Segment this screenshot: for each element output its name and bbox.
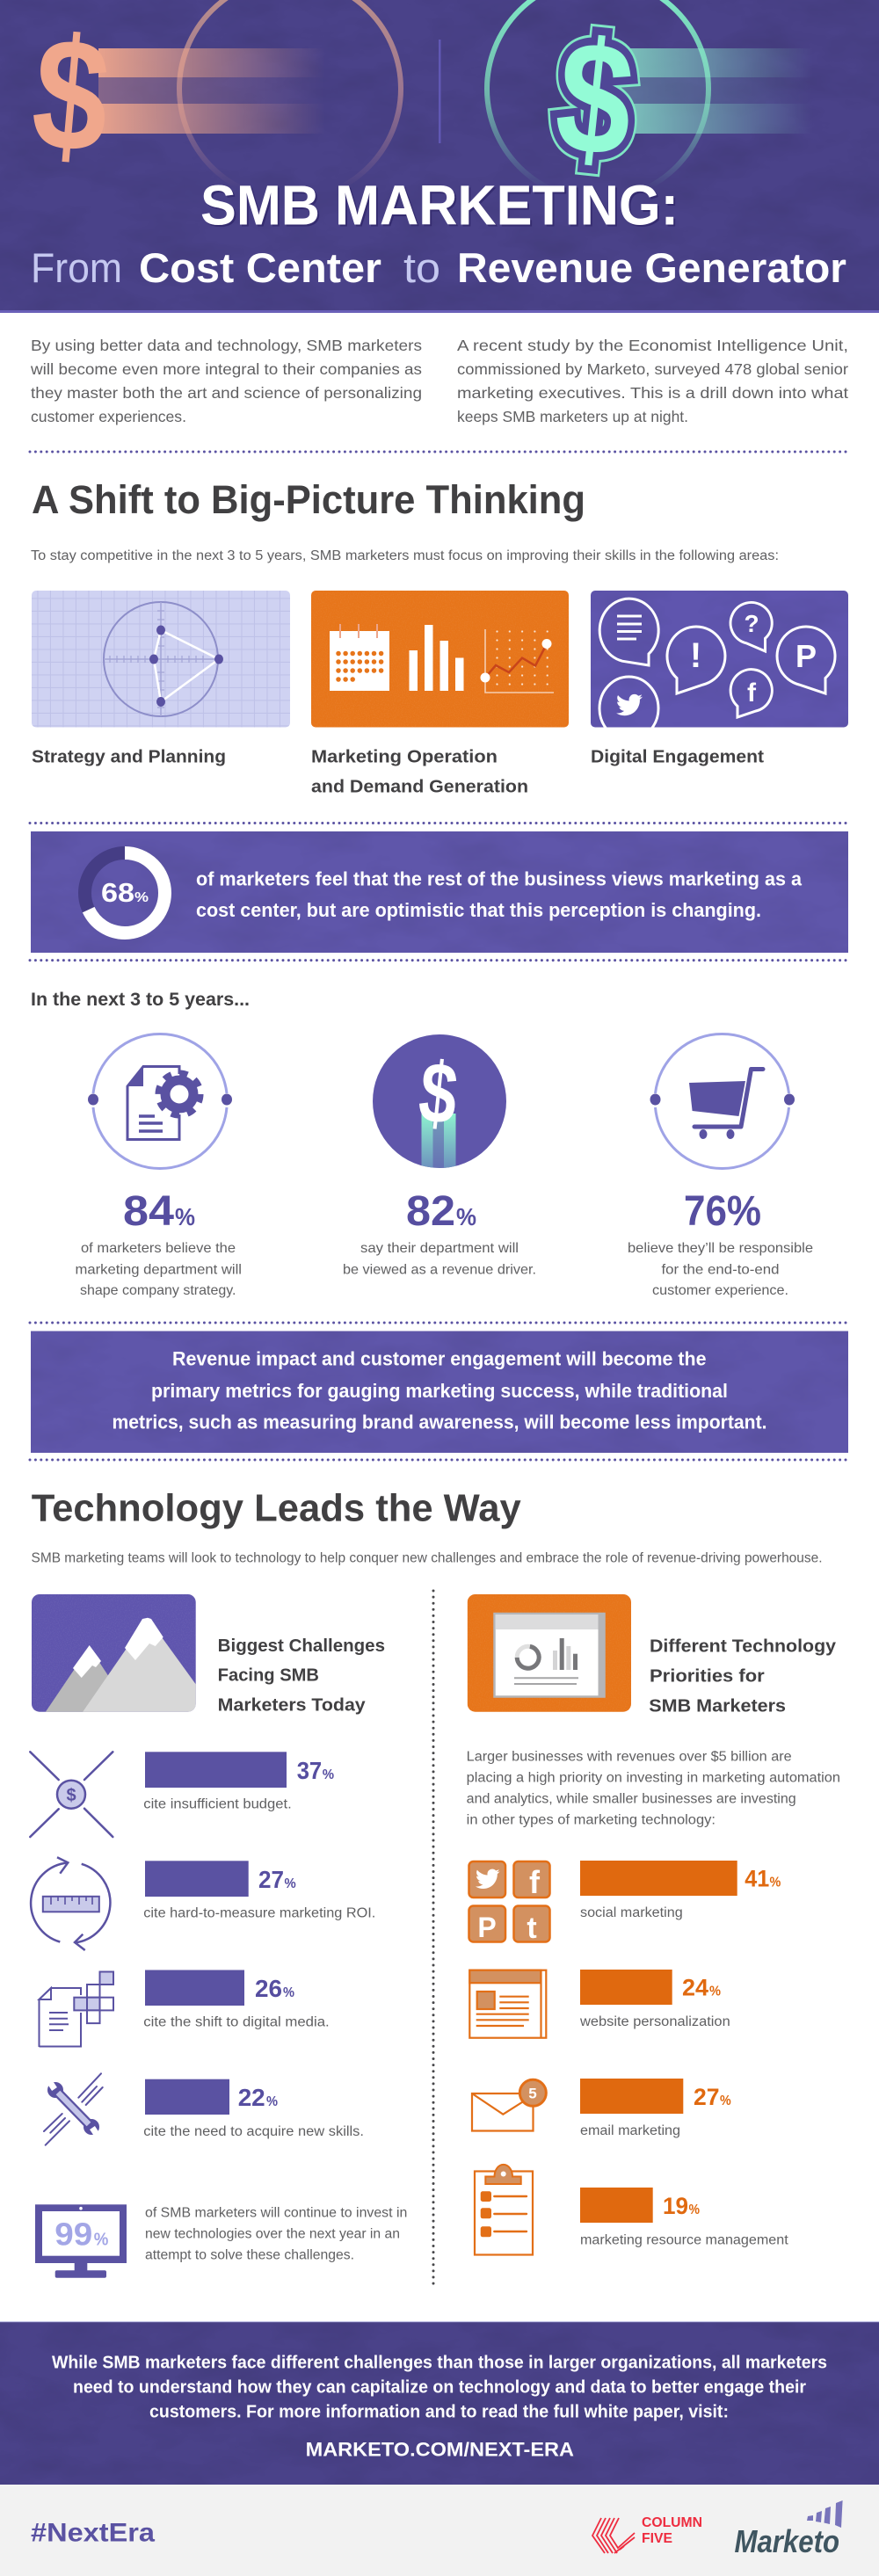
- banner text: [113, 1348, 766, 1433]
- text block: larger businesses: Larger businesses with revenues over $5 billion are: [467, 1749, 792, 1764]
- intro text right: marketing executives. This is a drill down into what: [457, 384, 848, 402]
- caption: [628, 1241, 813, 1298]
- callout text: [145, 2205, 407, 2262]
- icon: browser dashboard: [494, 1614, 605, 1696]
- chart: donut 68%: [84, 853, 165, 933]
- bar chart: [410, 625, 464, 691]
- logo: Marketo: [735, 2500, 843, 2559]
- callout text: new technologies over the next year in an: [145, 2226, 400, 2241]
- icon: monitor: 99: [54, 2216, 92, 2252]
- title: SMB MARKETING:: [200, 174, 679, 237]
- icon: bubble glyphs: f: [747, 678, 757, 707]
- caption: customer experience.: [652, 1283, 788, 1298]
- icon: calendar: [330, 624, 389, 691]
- value: 76%: [684, 1188, 761, 1235]
- icon: bubble glyphs: ?: [744, 610, 759, 637]
- icon: bubble glyphs: !: [690, 636, 701, 675]
- icon: revenue dollar: $: [415, 1042, 462, 1143]
- text block: larger businesses: and analytics, while smaller businesses are investing: [467, 1792, 796, 1807]
- panel: browser window: [468, 1594, 632, 1712]
- icon: social tiles: t: [527, 1912, 537, 1945]
- icon: mint dollar sign: $: [548, 5, 642, 192]
- banner text: Revenue impact and customer engagement will become the: [172, 1348, 707, 1370]
- value: %: [323, 1767, 334, 1782]
- chart: donut 68%: %: [134, 890, 149, 905]
- value: %: [689, 2202, 700, 2217]
- divider: [439, 40, 441, 143]
- icon: social speech bubbles: [599, 599, 835, 740]
- text block: larger businesses: in other types of marketing technology:: [467, 1813, 716, 1828]
- heading: technology priorities: SMB Marketers: [649, 1696, 786, 1716]
- icon: mint dollar sign: $: [548, 5, 642, 192]
- caption: believe they’ll be responsible: [628, 1241, 813, 1256]
- heading: biggest challenges: Biggest Challenges: [218, 1636, 385, 1656]
- logo: Column Five: COLUMN: [642, 2515, 702, 2530]
- icon: document and pixels: [39, 1972, 113, 2047]
- logo: Column Five: FIVE: [642, 2531, 672, 2546]
- icon: mint dollar sign: $: [548, 5, 642, 192]
- bar: [580, 2079, 683, 2114]
- value: 22: [238, 2084, 265, 2111]
- intro text left: [30, 337, 422, 425]
- icon: coin with cross lines: $: [66, 1786, 76, 1805]
- row: email marketing: [472, 2079, 731, 2138]
- icon: bubble glyphs: P: [795, 638, 817, 674]
- salmon speed bars: [98, 48, 325, 134]
- value: [406, 1188, 476, 1235]
- icon: bubble glyphs: [616, 610, 817, 715]
- banner: 68 percent: [31, 831, 848, 953]
- value: 37: [297, 1757, 322, 1784]
- row: website personalization: [469, 1970, 730, 2038]
- value: 41: [745, 1866, 769, 1892]
- bar: [580, 1861, 737, 1896]
- text block: larger businesses: placing a high priority on investing in marketing automation: [467, 1771, 840, 1786]
- stat: 84 percent: [76, 1034, 242, 1298]
- caption: cite the need to acquire new skills.: [143, 2124, 364, 2139]
- text block: larger businesses: [467, 1749, 840, 1828]
- value: 27: [258, 1866, 284, 1893]
- caption: cite hard-to-measure marketing ROI.: [143, 1906, 375, 1921]
- value: [123, 1188, 195, 1235]
- icon: envelope with badge: [472, 2079, 546, 2130]
- caption: for the end-to-end: [661, 1262, 779, 1277]
- heading: biggest challenges: Facing SMB: [218, 1666, 319, 1686]
- value: %: [720, 2093, 731, 2108]
- icon: ruler with arrows: [31, 1857, 110, 1950]
- caption: website personalization: [579, 2014, 730, 2029]
- heading: in the next 3 to 5 years: In the next 3 to 5 years...: [31, 990, 250, 1010]
- label: marketing operation and demand generation: [311, 747, 528, 796]
- icon: small mountain: [46, 1645, 109, 1712]
- logo: Marketo: Marketo: [735, 2523, 839, 2559]
- value: %: [285, 1876, 296, 1891]
- header panel: [0, 0, 879, 313]
- bar: [580, 2188, 653, 2223]
- heading: Technology Leads the Way: Technology Leads the Way: [32, 1487, 521, 1530]
- panel: digital engagement: [591, 591, 848, 740]
- row: new skills: [44, 2073, 364, 2145]
- value: [255, 1975, 294, 2002]
- heading: technology priorities: Priorities for: [650, 1666, 765, 1686]
- panel: closing call to action: [0, 2321, 879, 2485]
- icon: document and gear: [88, 1034, 232, 1169]
- icon: monitor: [35, 2204, 127, 2278]
- label: strategy and planning: Strategy and Planning: [32, 747, 226, 766]
- callout: 99 percent: [35, 2204, 407, 2278]
- closing text: need to understand how they can capitalize on technology and data to better engage their: [73, 2377, 806, 2398]
- icon: radar diagram: [104, 602, 223, 716]
- intro text left: By using better data and technology, SMB marketers: [31, 337, 422, 354]
- value: [238, 2084, 278, 2111]
- label: digital engagement: Digital Engagement: [591, 747, 764, 766]
- intro text left: will become even more integral to their companies as: [30, 360, 422, 378]
- icon: monitor: %: [94, 2230, 108, 2249]
- banner text: primary metrics for gauging marketing success, while traditional: [151, 1380, 728, 1402]
- section intro: To stay competitive in the next 3 to 5 years, SMB marketers must focus on improving their skills in the following areas:: [31, 548, 779, 563]
- row: marketing resource management: [475, 2165, 788, 2255]
- panel: marketing operation: [311, 591, 569, 728]
- caption: marketing department will: [76, 1262, 242, 1277]
- icon: wrench: [44, 2073, 103, 2145]
- icon: shopping cart: [650, 1034, 795, 1169]
- subtitle: [31, 244, 846, 291]
- value: 27: [694, 2084, 719, 2110]
- caption: of marketers believe the: [81, 1241, 236, 1256]
- value: %: [456, 1203, 476, 1230]
- panel: strategy and planning: [32, 591, 290, 728]
- logo: Column Five: [592, 2515, 702, 2553]
- icon: revenue dollar: [373, 1034, 506, 1170]
- intro text right: [457, 337, 848, 425]
- banner: revenue impact: [31, 1331, 848, 1453]
- caption: [76, 1241, 242, 1298]
- icon: big mountain: [83, 1618, 196, 1712]
- callout text: of SMB marketers will continue to invest in: [145, 2205, 407, 2220]
- value: %: [175, 1203, 195, 1230]
- value: 82: [406, 1188, 455, 1235]
- caption: cite insufficient budget.: [143, 1797, 292, 1812]
- row: marketing ROI: [31, 1857, 375, 1950]
- banner text: of marketers feel that the rest of the business views marketing as a: [196, 868, 803, 889]
- section intro: SMB marketing teams will look to technology to help conquer new challenges and embrace the role of revenue-driving powerhouse.: [32, 1551, 823, 1566]
- icon: web page: [469, 1970, 546, 2038]
- banner text: metrics, such as measuring brand awareness, will become less important.: [113, 1411, 766, 1433]
- caption: marketing resource management: [580, 2232, 788, 2247]
- caption: email marketing: [580, 2123, 680, 2138]
- icon: coin with cross lines: [30, 1752, 113, 1837]
- caption: be viewed as a revenue driver.: [343, 1262, 536, 1277]
- panel: footer: [0, 2485, 879, 2576]
- chart: donut 68%: 68: [101, 877, 134, 908]
- bar: [145, 2079, 229, 2115]
- icon: social tiles: [469, 1861, 550, 1945]
- label: marketing operation and demand generation: Marketing Operation: [311, 747, 498, 766]
- intro text left: they master both the art and science of personalizing: [31, 384, 422, 402]
- banner text: [196, 868, 803, 921]
- heading: biggest challenges: Marketers Today: [218, 1696, 367, 1716]
- row: digital media: [39, 1970, 330, 2047]
- subtitle: Revenue Generator: [457, 244, 846, 291]
- icon: social tiles: P: [477, 1912, 497, 1943]
- heading: technology priorities: Different Technology: [650, 1636, 837, 1656]
- stat: 76 percent: [628, 1034, 813, 1298]
- heading: technology priorities: [649, 1636, 837, 1716]
- intro text right: A recent study by the Economist Intelligence Unit,: [457, 337, 848, 354]
- row: insufficient budget: [30, 1752, 334, 1837]
- revenue circle: [487, 0, 708, 200]
- caption: [343, 1241, 536, 1277]
- panel: mountains: [32, 1594, 196, 1712]
- intro text right: commissioned by Marketo, surveyed 478 global senior: [457, 360, 848, 378]
- caption: shape company strategy.: [80, 1283, 236, 1298]
- value: 24: [682, 1975, 708, 2001]
- value: %: [283, 1985, 294, 2000]
- icon: salmon dollar sign: $: [26, 3, 116, 187]
- heading: biggest challenges: [218, 1636, 385, 1716]
- caption: say their department will: [360, 1241, 519, 1256]
- line chart: [480, 629, 554, 693]
- cost circle: [179, 0, 401, 200]
- hashtag: #NextEra: [31, 2519, 155, 2548]
- subtitle: Cost Center: [139, 244, 381, 291]
- row: social marketing: [469, 1861, 781, 1945]
- value: 26: [255, 1975, 282, 2002]
- closing text: While SMB marketers face different challenges than those in larger organizations, all marketers: [52, 2353, 827, 2373]
- callout text: attempt to solve these challenges.: [145, 2247, 354, 2262]
- bar: [145, 1861, 249, 1897]
- banner text: cost center, but are optimistic that this perception is changing.: [196, 899, 761, 921]
- bar: [145, 1752, 287, 1788]
- subtitle: to: [403, 244, 440, 291]
- intro text left: customer experiences.: [31, 408, 186, 425]
- heading: A Shift to Big-Picture Thinking: A Shift to Big-Picture Thinking: [32, 477, 585, 522]
- subtitle: From: [31, 244, 122, 291]
- icon: clipboard checklist: [475, 2165, 533, 2255]
- mint speed bars: [620, 48, 813, 134]
- value: %: [709, 1985, 721, 1999]
- stat: 82 percent: [343, 1034, 536, 1277]
- value: %: [770, 1876, 781, 1890]
- icon: envelope with badge: 5: [528, 2085, 537, 2102]
- value: %: [266, 2094, 278, 2109]
- closing text: [52, 2353, 827, 2422]
- bar: [145, 1970, 244, 2006]
- value: [682, 1975, 721, 2001]
- URL: MARKETO.COM/NEXT-ERA: [306, 2438, 574, 2460]
- icon: social tiles: f: [529, 1864, 541, 1900]
- value: 84: [123, 1188, 174, 1235]
- intro text right: keeps SMB marketers up at night.: [457, 408, 688, 425]
- caption: cite the shift to digital media.: [143, 2015, 330, 2030]
- value: 19: [663, 2193, 688, 2219]
- label: marketing operation and demand generation: and Demand Generation: [311, 777, 528, 796]
- closing text: customers. For more information and to read the full white paper, visit:: [149, 2402, 729, 2422]
- bar: [580, 1970, 672, 2005]
- caption: social marketing: [580, 1905, 683, 1920]
